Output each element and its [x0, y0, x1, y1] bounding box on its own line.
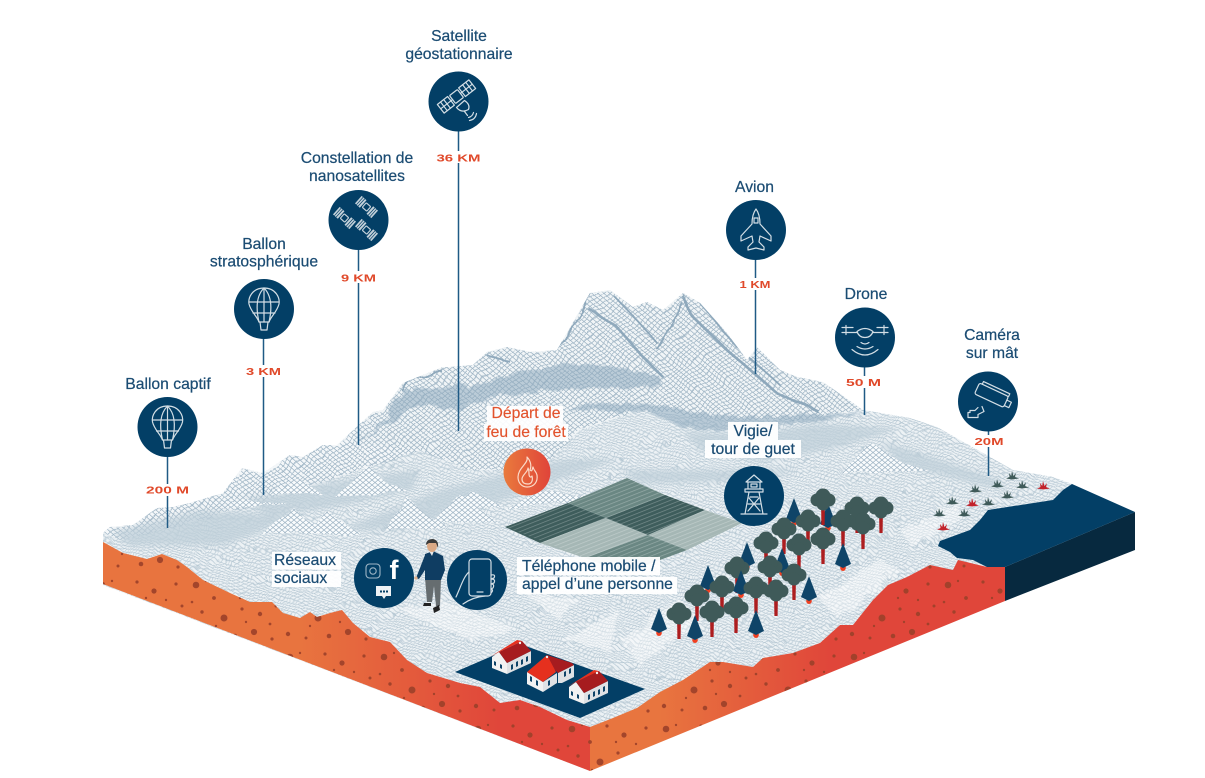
house right	[567, 670, 608, 704]
altitude	[971, 435, 1007, 448]
station: Ballon stratosphérique	[210, 236, 318, 495]
altitude: 3 KM	[246, 367, 281, 378]
altitude	[732, 278, 780, 291]
text background	[517, 557, 677, 594]
icon: watchtower	[724, 466, 784, 526]
altitude: 9 KM	[341, 274, 376, 284]
heading: Constellation de	[301, 150, 413, 167]
text background	[484, 406, 568, 441]
mid-ground dense strands	[112, 422, 1005, 548]
plot	[455, 644, 645, 718]
icon: plane	[726, 200, 786, 260]
connector line	[458, 130, 460, 431]
heading: stratosphérique	[210, 254, 318, 270]
heading: Avion	[735, 179, 774, 196]
dark ridge bands	[360, 363, 663, 440]
icon: social networks	[354, 548, 414, 608]
icon: hand holding phone	[447, 550, 507, 610]
foreground peaks	[235, 442, 928, 536]
text background	[705, 422, 801, 458]
connector line	[166, 450, 168, 528]
heading: nanosatellites	[309, 168, 405, 185]
heading: Réseaux	[274, 552, 336, 569]
heading: Ballon captif	[125, 376, 211, 393]
station: Départ de feu de forêt	[484, 405, 568, 496]
altitude: 50 M	[846, 378, 881, 389]
soil front-right face	[590, 560, 1005, 771]
heading: Caméra	[964, 327, 1020, 344]
station: Avion	[726, 179, 786, 374]
terrain surface: wireframe landscape	[80, 270, 1160, 778]
person with phone	[414, 539, 445, 613]
station: Drone	[835, 286, 895, 415]
station: Vigie / tour de guet	[705, 422, 801, 526]
far mountains	[350, 290, 863, 470]
icon: balloon	[234, 279, 294, 339]
connector line	[358, 248, 360, 445]
icon: drone	[835, 308, 895, 368]
connector line	[864, 366, 866, 415]
house left	[490, 640, 531, 674]
icon: balloon	[138, 397, 198, 457]
icon: satellite	[428, 72, 488, 132]
forest	[651, 488, 894, 643]
heading: appel d’une personne	[522, 576, 673, 593]
altitude: 1 KM	[740, 280, 770, 291]
water side face	[1005, 512, 1135, 601]
farm fields	[505, 478, 742, 573]
station: Constellation de nanosatellites	[301, 150, 414, 445]
grass tufts	[933, 471, 1050, 530]
house centre	[527, 655, 574, 692]
altitude: 20M	[974, 437, 1004, 448]
icon: camera	[958, 372, 1018, 432]
village on dark plot	[455, 640, 645, 718]
station: Ballon captif	[125, 376, 211, 528]
heading: sociaux	[274, 570, 327, 587]
station: Satellite géostationnaire	[405, 28, 513, 431]
distant ridge, left	[103, 412, 420, 540]
water surface	[938, 484, 1135, 567]
icon: nanosatellites	[328, 190, 388, 250]
station: Téléphone mobile	[447, 550, 677, 610]
heading: Drone	[845, 286, 888, 303]
heading: Vigie/	[734, 423, 772, 440]
station: Caméra sur mât	[958, 327, 1020, 476]
soil front-left face	[103, 542, 590, 771]
altitude: 200 M	[146, 486, 189, 496]
icon: flame	[504, 448, 550, 496]
text background	[272, 552, 341, 587]
lighter patches in foreground	[400, 502, 961, 666]
connector line	[988, 430, 990, 476]
altitude	[338, 271, 380, 284]
connector line	[754, 258, 756, 374]
terrain block	[80, 270, 1160, 778]
altitude	[244, 365, 284, 378]
heading: feu de forêt	[486, 424, 566, 441]
heading: géostationnaire	[405, 46, 513, 63]
station: Réseaux sociaux	[272, 548, 414, 608]
altitude: 36 KM	[436, 154, 480, 164]
heading: Satellite	[431, 28, 487, 45]
heading: Ballon	[242, 236, 286, 253]
ridge lines	[403, 293, 817, 410]
icon: social networks: f	[390, 555, 400, 585]
altitude	[434, 151, 484, 164]
heading: Départ de	[492, 405, 560, 422]
heading: tour de guet	[711, 441, 796, 458]
heading: sur mât	[966, 345, 1019, 362]
altitude	[146, 484, 190, 496]
heading: Téléphone mobile /	[522, 558, 655, 575]
connector line	[262, 335, 264, 495]
